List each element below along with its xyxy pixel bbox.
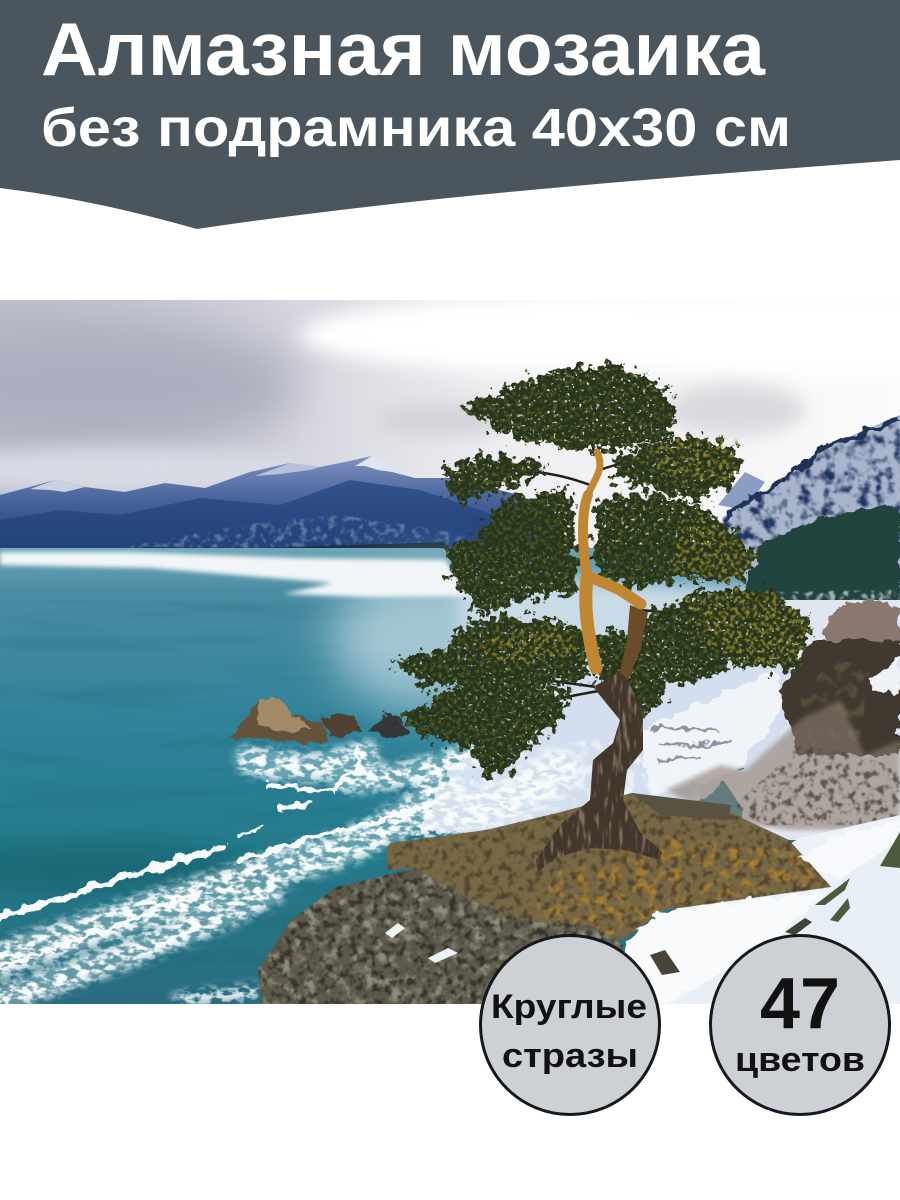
branches bbox=[420, 415, 780, 730]
header banner bbox=[0, 0, 900, 229]
offshore rocks bbox=[230, 697, 407, 743]
upper dark limb bbox=[620, 605, 648, 680]
title: Алмазная мозаика bbox=[41, 7, 766, 91]
badge: 47 colors: цветов bbox=[735, 1041, 865, 1079]
sunlit needles bbox=[470, 440, 810, 665]
dark rock bbox=[777, 640, 900, 755]
right bank with bushes bbox=[665, 598, 900, 835]
pine tree bbox=[393, 363, 813, 872]
landscape photo bbox=[0, 293, 900, 1004]
badge: round rhinestones bbox=[480, 936, 660, 1114]
foreground cliff bbox=[258, 793, 831, 1004]
badge: 47 colors: 47 bbox=[760, 964, 840, 1044]
lower bushes bbox=[665, 700, 900, 830]
rock face bbox=[258, 868, 623, 1004]
water bbox=[0, 548, 900, 1004]
bark texture bbox=[536, 670, 662, 872]
golden trunk bbox=[583, 452, 641, 668]
pale ice behind tree bbox=[455, 570, 800, 740]
lower trunk bbox=[536, 670, 662, 872]
frozen beach bbox=[420, 600, 900, 840]
snow patches bbox=[623, 823, 900, 1004]
subtitle: без подрамника 40х30 см bbox=[41, 98, 791, 158]
sky bbox=[0, 300, 818, 548]
ice shelf bbox=[0, 552, 470, 597]
distant mountains bbox=[0, 456, 765, 558]
foliage mass bbox=[393, 363, 813, 777]
snow behind bushes bbox=[724, 768, 746, 809]
surf foam bbox=[0, 745, 560, 1000]
bare bushes above bank bbox=[822, 598, 900, 643]
right wooded mountain bbox=[722, 415, 900, 625]
badge: round rhinestones: Круглые bbox=[491, 988, 647, 1026]
foliage highlights bbox=[393, 363, 813, 777]
badge: 47 colors bbox=[710, 936, 890, 1114]
badge: round rhinestones: стразы bbox=[502, 1037, 638, 1075]
grassy top bbox=[387, 793, 831, 940]
snow ground base bbox=[666, 815, 900, 1004]
